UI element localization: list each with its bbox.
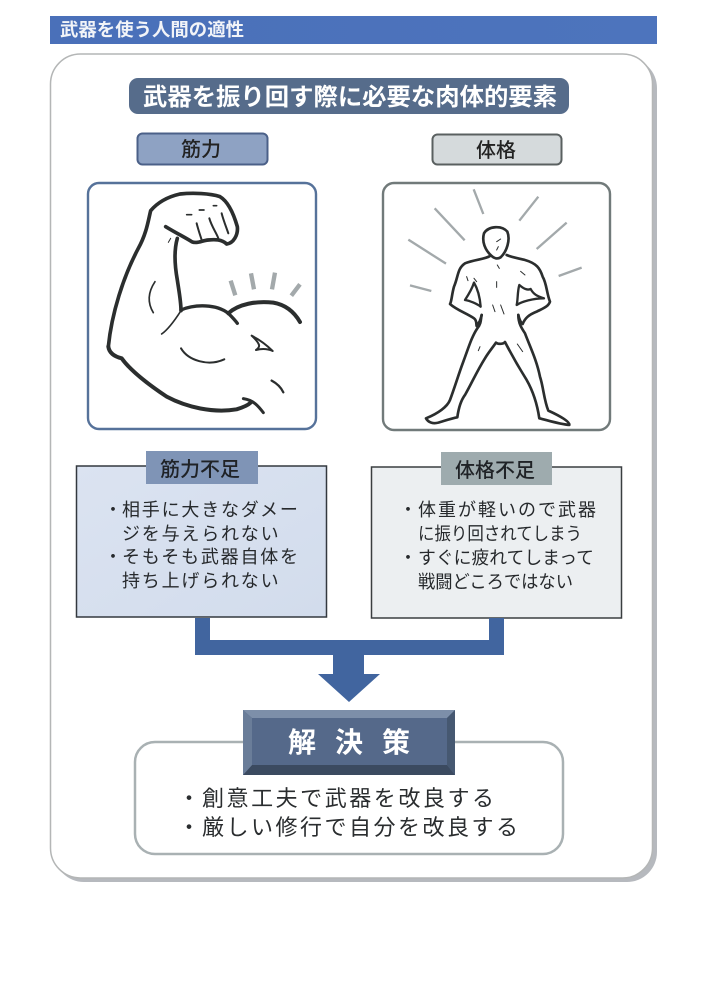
list: solutions: ・ xyxy=(178,786,200,811)
list: lack of physique xyxy=(399,500,596,592)
list: lack of strength: ・ xyxy=(104,500,124,520)
list: lack of physique: に振り回されてしまう xyxy=(418,524,582,544)
list: lack of physique: 戦闘どころではない xyxy=(418,572,573,592)
list: lack of physique: すぐに疲れてしまって xyxy=(418,548,594,568)
list: lack of strength xyxy=(104,500,300,591)
list: lack of physique: ・ xyxy=(399,500,417,520)
list: solutions: 創意工夫で武器を改良する xyxy=(202,786,494,811)
list: lack of physique: 体重が軽いので武器 xyxy=(418,500,596,520)
image panel: flexed arm xyxy=(88,183,316,429)
list: lack of strength: 持ち上げられない xyxy=(122,571,280,591)
icon: radiating lines xyxy=(408,189,582,291)
list: lack of strength: 相手に大きなダメー xyxy=(122,500,300,520)
tag: lack of strength: 筋力不足 xyxy=(160,458,240,481)
icon: flexed arm xyxy=(108,193,300,413)
image panel: muscular figure xyxy=(383,183,610,430)
icon: muscular figure xyxy=(408,189,582,425)
label: strength xyxy=(138,134,268,164)
list: solutions xyxy=(178,786,518,840)
header bar xyxy=(50,16,657,44)
icon: emphasis marks xyxy=(231,273,300,296)
header bar: 武器を使う人間の適性 xyxy=(60,20,244,40)
panel title xyxy=(129,78,569,114)
label: physique xyxy=(432,134,562,164)
tag: lack of strength xyxy=(146,451,258,484)
label: physique: 体格 xyxy=(476,139,516,162)
list: lack of strength: ジを与えられない xyxy=(122,524,280,544)
tag: lack of physique xyxy=(441,452,552,485)
list: solutions: ・ xyxy=(178,815,200,840)
list: solutions: 厳しい修行で自分を改良する xyxy=(202,815,518,840)
tag: lack of physique: 体格不足 xyxy=(455,459,535,482)
heading: solution plate xyxy=(243,710,455,775)
panel: solution xyxy=(135,742,563,854)
label: strength: 筋力 xyxy=(181,138,221,161)
panel: lack of strength xyxy=(76,451,326,617)
main panel xyxy=(50,54,657,882)
panel title: 武器を振り回す際に必要な肉体的要素 xyxy=(143,84,557,111)
list: lack of physique: ・ xyxy=(399,548,417,568)
panel: lack of physique xyxy=(372,452,622,618)
arrow: merge to solution xyxy=(195,618,504,702)
list: lack of strength: そもそも武器自体を xyxy=(122,547,300,567)
heading: solution plate: 解決策 xyxy=(288,727,429,758)
list: lack of strength: ・ xyxy=(104,547,124,567)
